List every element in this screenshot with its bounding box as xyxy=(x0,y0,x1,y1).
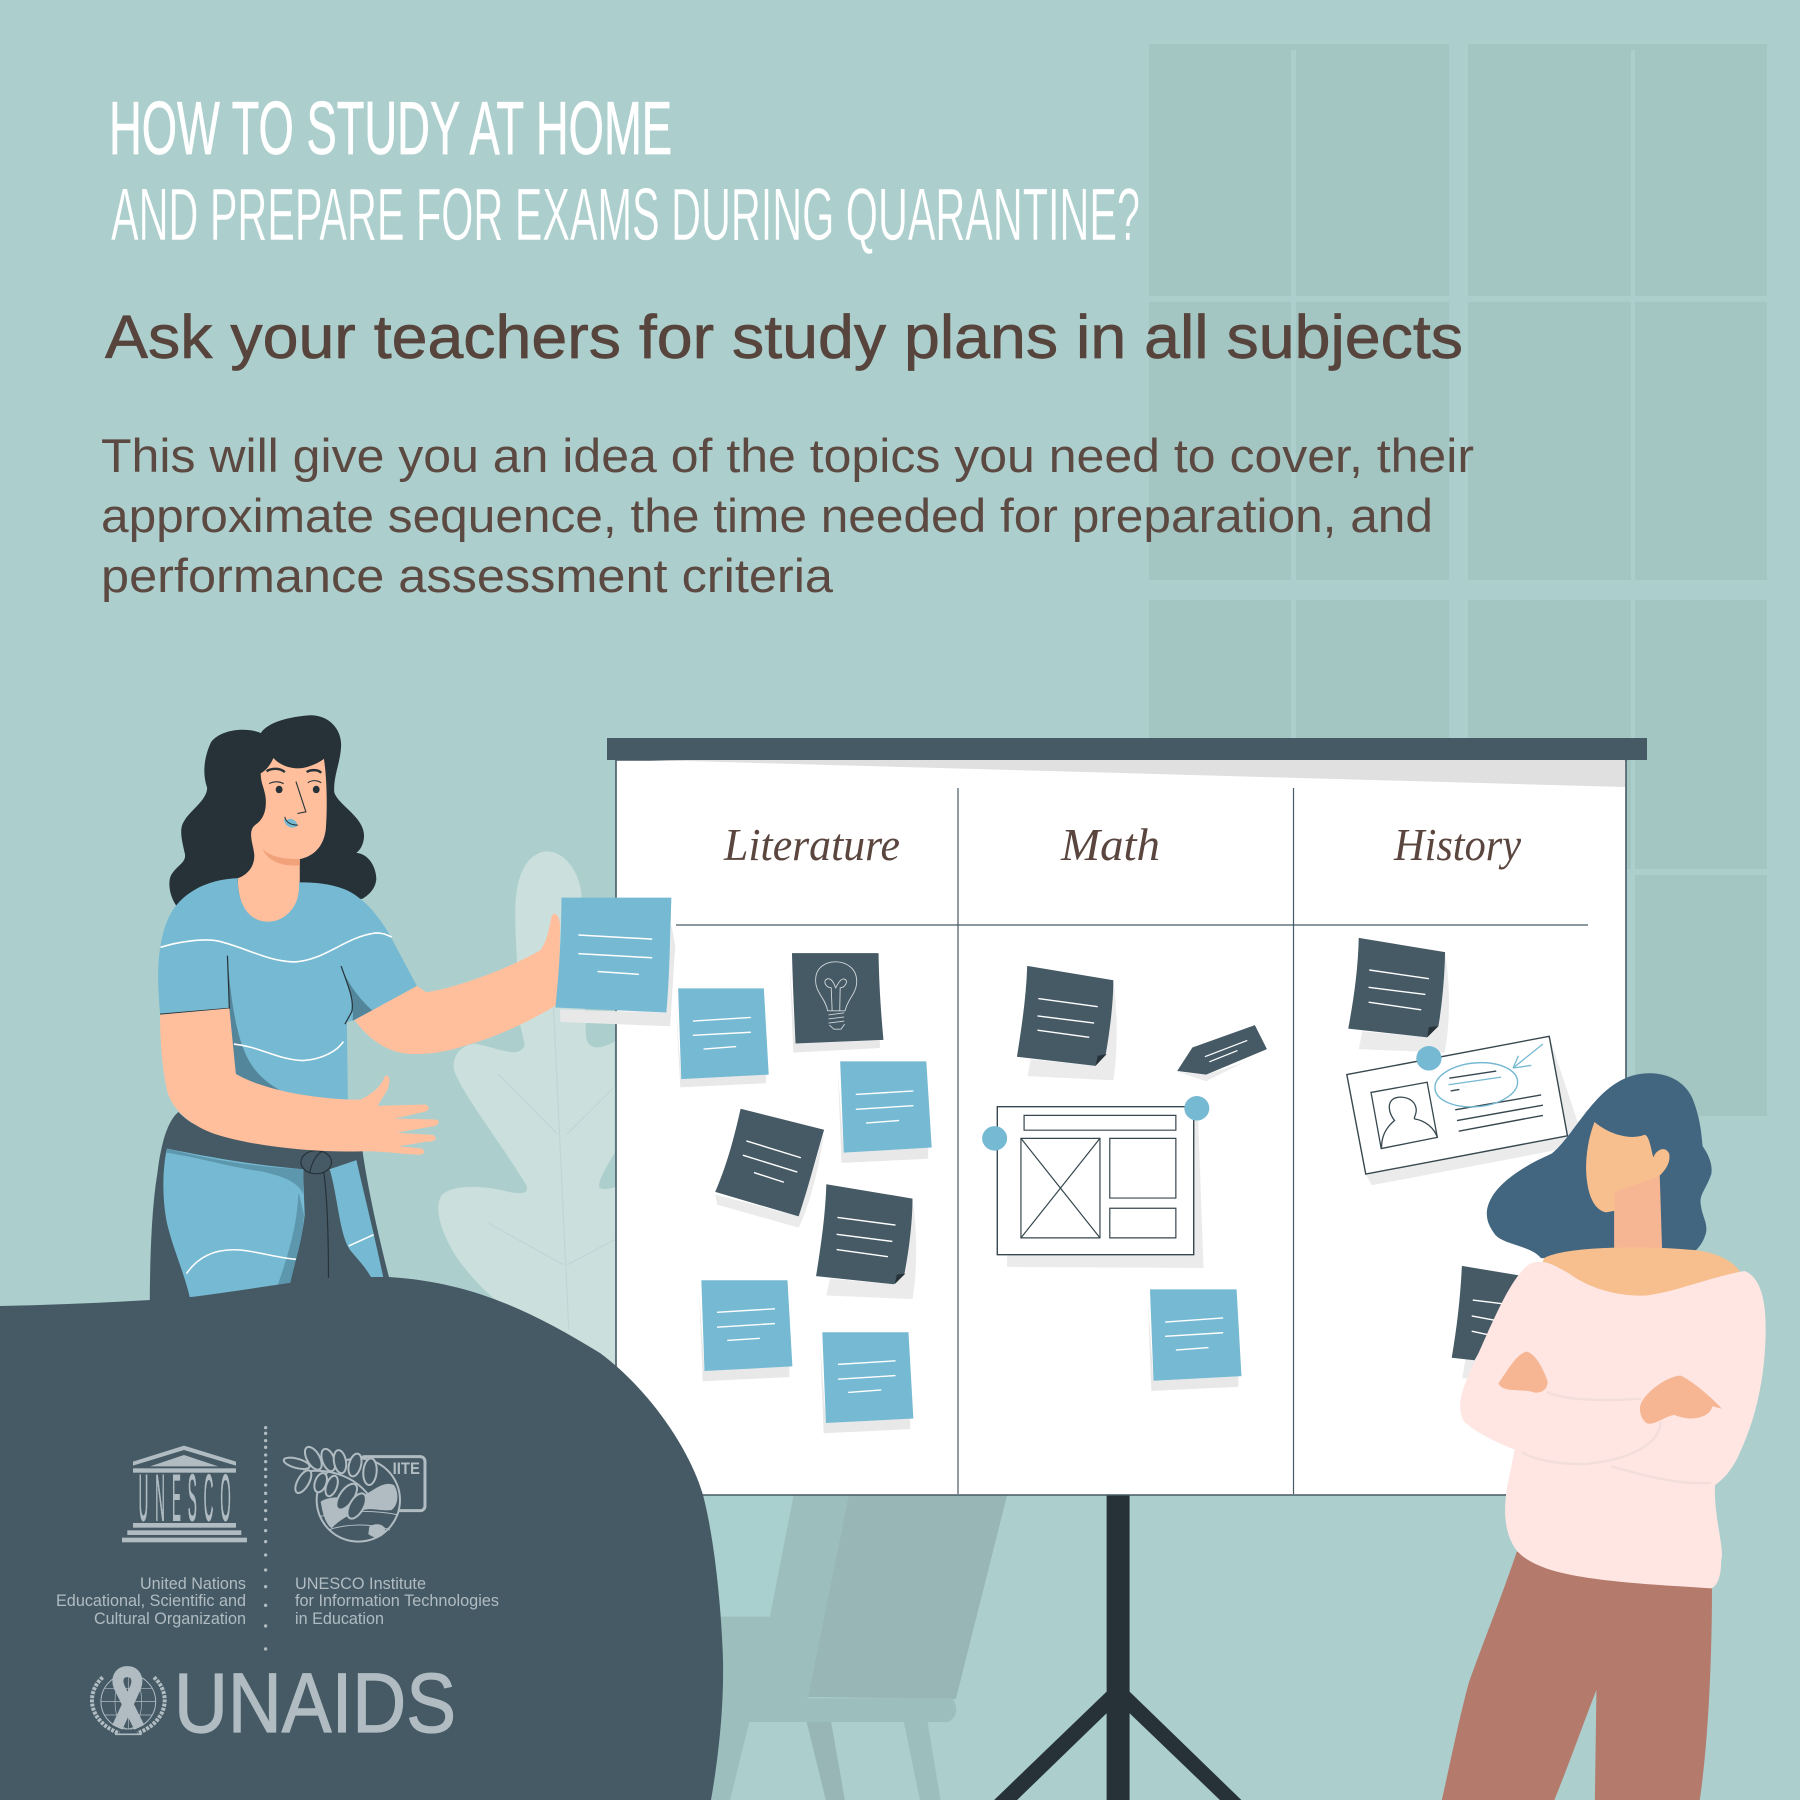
dark note in math column xyxy=(1017,966,1117,1080)
hands xyxy=(1498,1352,1722,1424)
board grid lines xyxy=(676,788,1588,1494)
dark note top xyxy=(1348,938,1449,1053)
literature and math sticky notes xyxy=(676,953,1267,1433)
upper body xyxy=(1460,1073,1766,1520)
UNAIDS wordmark: UNAIDS xyxy=(174,1656,456,1750)
UNESCO caption: Educational, Scientific and xyxy=(56,1591,246,1610)
dark tilted note xyxy=(715,1109,824,1228)
woman with crossed arms on the right xyxy=(1442,1073,1766,1800)
sweater xyxy=(1460,1262,1766,1520)
blue note 3 xyxy=(699,1280,792,1381)
UNESCO caption: United Nations xyxy=(140,1574,246,1593)
dark note behind woman xyxy=(1452,1266,1524,1381)
dotted divider xyxy=(264,1426,267,1651)
logos xyxy=(56,1426,499,1750)
IITE caption xyxy=(295,1574,499,1628)
planning board xyxy=(607,738,1647,1495)
dark curled note xyxy=(816,1184,916,1299)
plant behind board xyxy=(438,851,617,1393)
lower arm and hand xyxy=(160,1008,439,1155)
blue note 2 xyxy=(838,1061,932,1163)
woman presenting on the left xyxy=(150,715,675,1310)
title xyxy=(109,86,1140,256)
IITE logo: IITE xyxy=(393,1459,420,1478)
raised arm and hand xyxy=(354,914,560,1054)
title line 1: HOW TO STUDY AT HOME xyxy=(109,86,672,170)
sweater creases xyxy=(1522,1392,1711,1483)
heading: Ask your teachers for study plans in all subjects xyxy=(105,303,1463,371)
body text: This will give you an idea of the topics you need to cover, their xyxy=(101,429,1474,482)
t-shirt lines xyxy=(160,933,392,1061)
column heading: Math: Math xyxy=(1060,819,1160,870)
chest xyxy=(1531,1247,1741,1297)
t-shirt shadows xyxy=(227,956,372,1095)
hair xyxy=(1487,1073,1712,1258)
face xyxy=(1586,1122,1669,1212)
body text: performance assessment criteria xyxy=(101,549,834,602)
hair xyxy=(169,715,376,906)
body text xyxy=(101,429,1474,602)
window panes backdrop xyxy=(1149,44,1767,1116)
column heading: Literature: Literature xyxy=(723,819,900,870)
neck shadow xyxy=(263,849,300,866)
board top bar xyxy=(607,738,1647,760)
blue note in math column xyxy=(1148,1289,1241,1391)
UNESCO logo xyxy=(122,1446,247,1542)
blue note 4 xyxy=(820,1332,913,1433)
column heading: History: History xyxy=(1393,819,1522,870)
history column items xyxy=(1347,938,1578,1381)
board surface xyxy=(616,760,1626,1495)
dark tag note xyxy=(1177,1025,1267,1081)
sweater hem xyxy=(1505,1450,1740,1588)
IITE caption: UNESCO Institute xyxy=(295,1574,426,1593)
facial features xyxy=(266,769,321,828)
IITE caption: in Education xyxy=(295,1609,384,1628)
blue note 1 xyxy=(676,988,769,1087)
profile card xyxy=(1347,1036,1578,1185)
board shadow xyxy=(650,760,1625,787)
body text: approximate sequence, the time needed for preparation, and xyxy=(101,489,1433,542)
UNESCO logo: UNESCO xyxy=(139,1462,238,1536)
wireframe sheet xyxy=(982,1096,1209,1268)
face and neck xyxy=(238,758,327,925)
tied jacket and skirt xyxy=(150,1112,395,1310)
UNAIDS emblem xyxy=(92,1672,165,1734)
dark note with light bulb xyxy=(790,953,883,1053)
board stand xyxy=(994,1495,1241,1800)
neck xyxy=(1611,1176,1662,1253)
t-shirt xyxy=(158,878,417,1111)
UNESCO caption xyxy=(56,1574,246,1628)
IITE caption: for Information Technologies xyxy=(295,1591,499,1610)
IITE logo xyxy=(283,1444,425,1542)
sticky note held in hand xyxy=(555,898,675,1026)
trousers xyxy=(1442,1552,1712,1800)
dark corner shape xyxy=(0,1277,723,1800)
chair behind board xyxy=(699,1495,1007,1800)
UNESCO caption: Cultural Organization xyxy=(94,1609,246,1628)
